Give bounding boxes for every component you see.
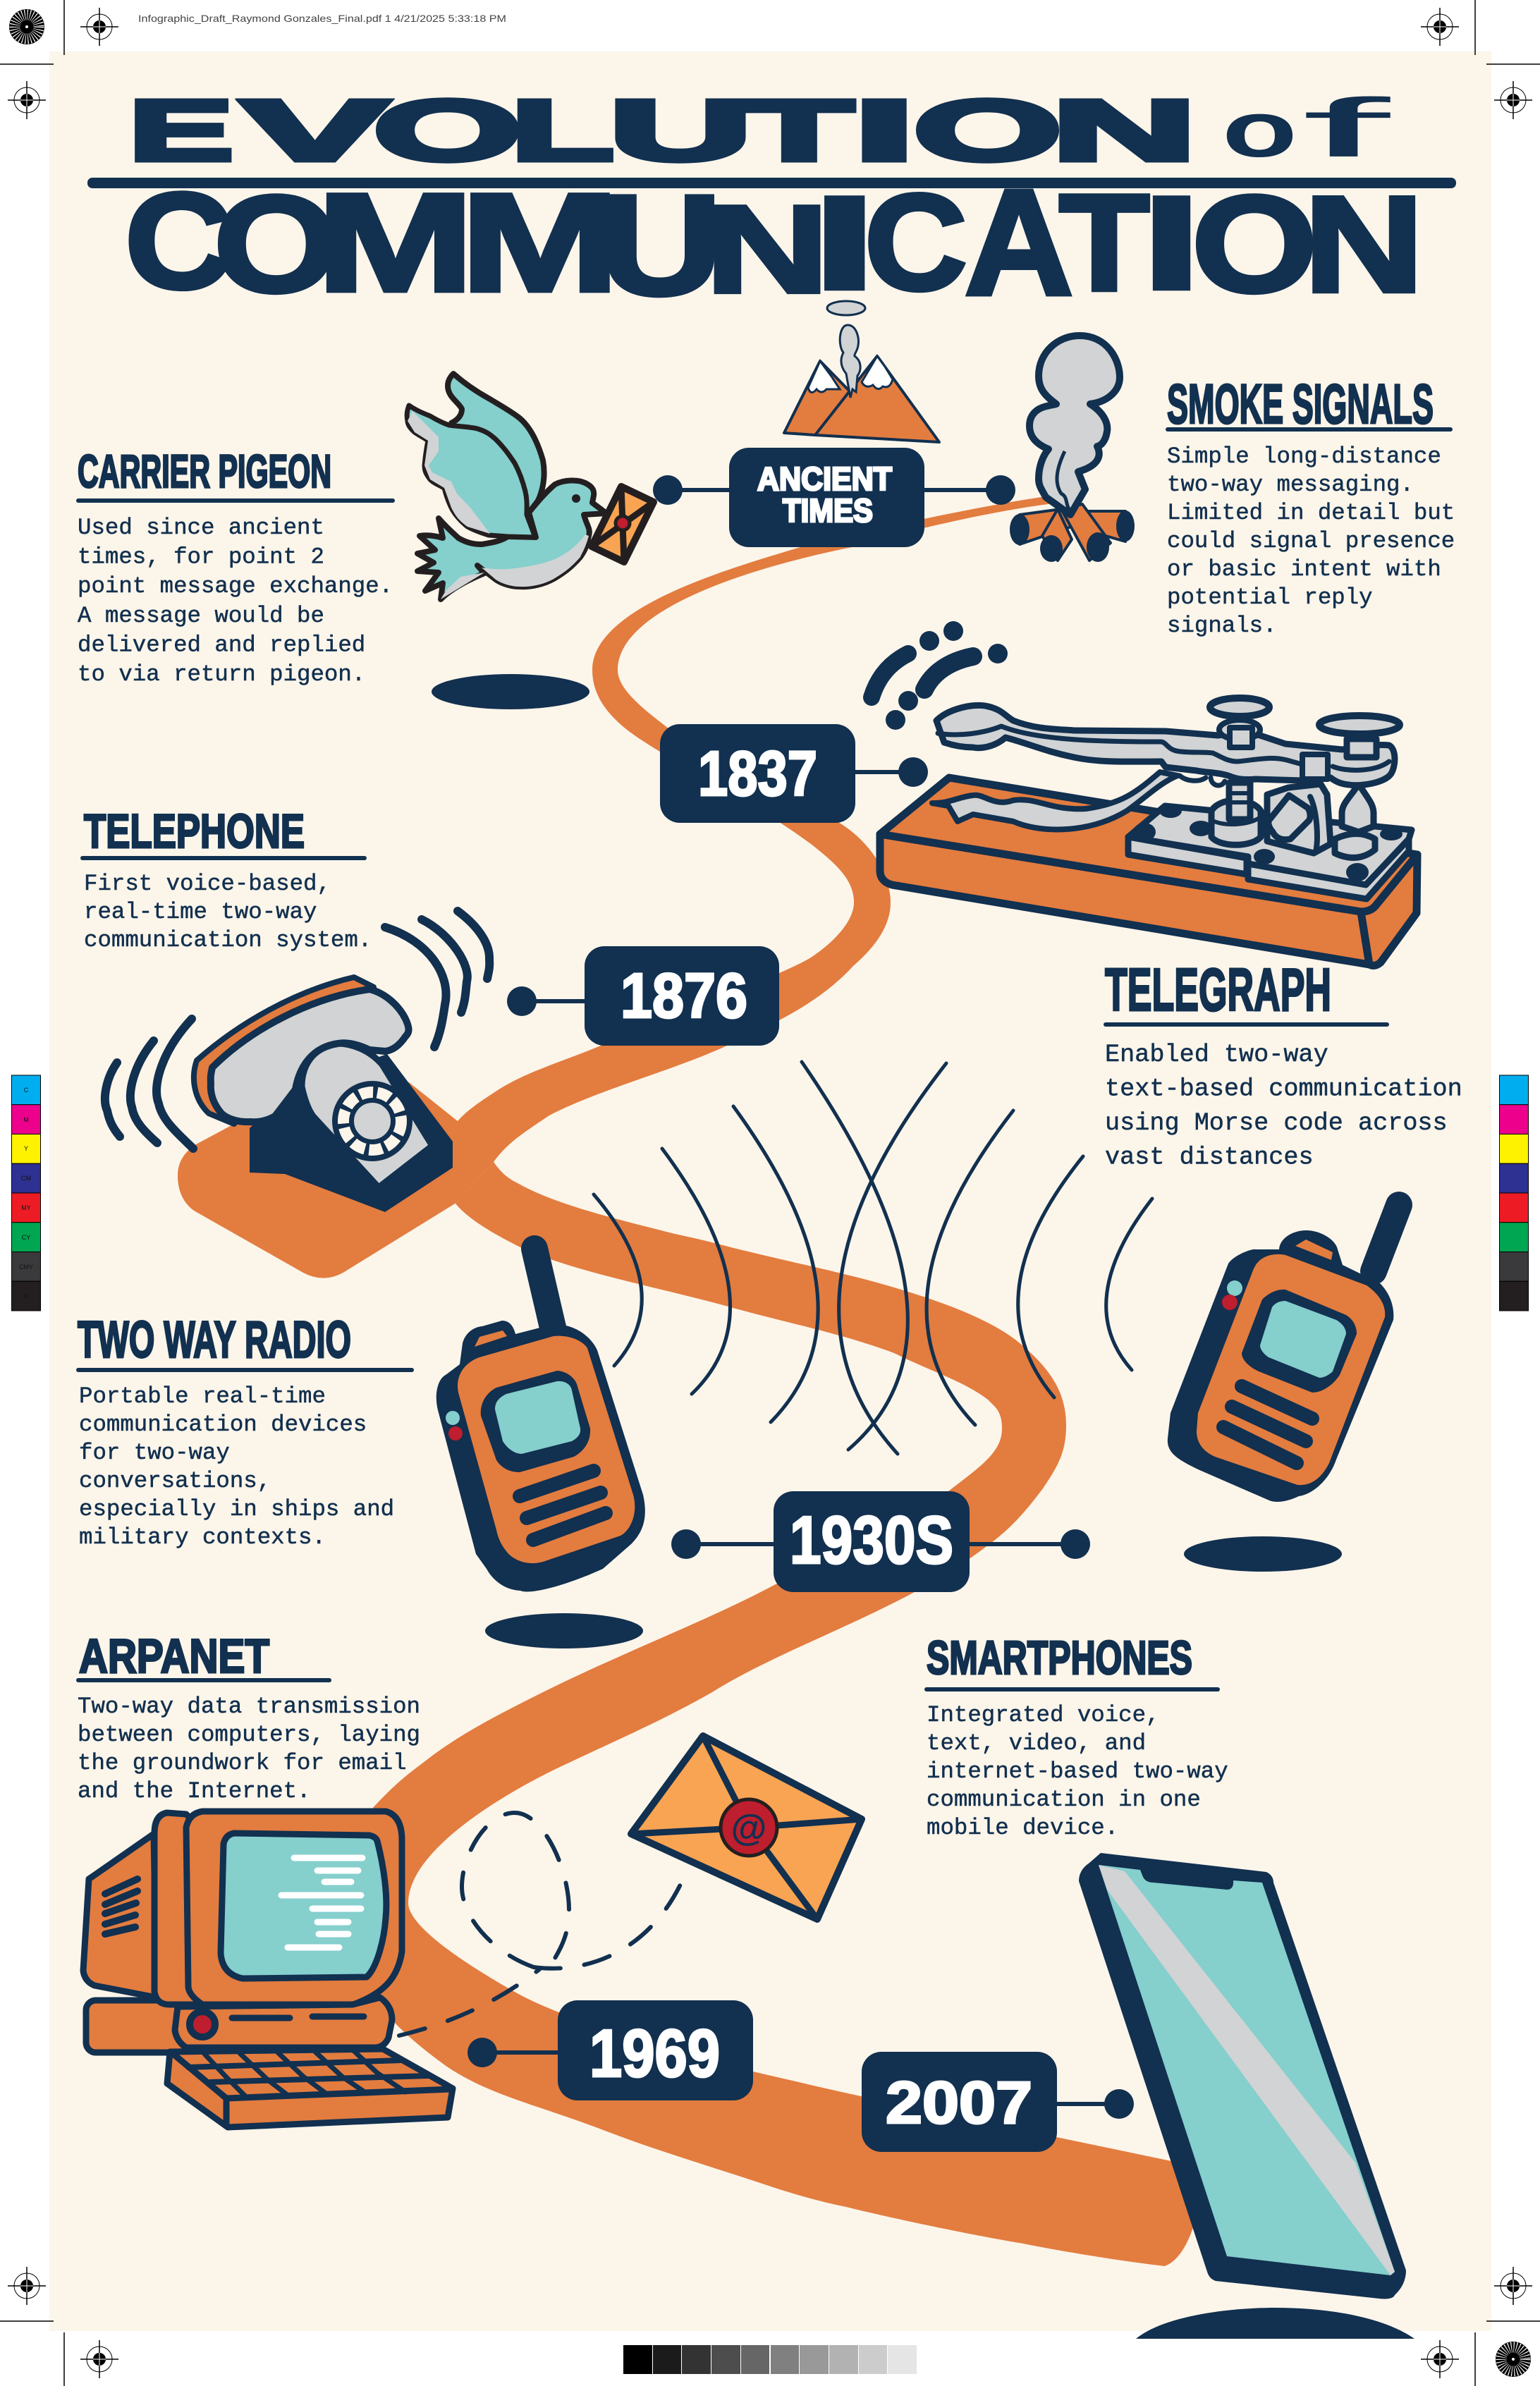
icon: left two way radio [436,1249,645,1592]
shadow: smartphone [1136,2308,1414,2339]
icon: smartphone [1079,1853,1406,2299]
section: two way radio: Portable real-time [79,1383,326,1409]
title line: Evolution of: T [745,83,853,179]
title line: Evolution of: U [609,83,752,179]
dashed email flight path [399,1813,689,2036]
title line: Communication: I [1142,170,1202,318]
date marker: 1969 [468,2000,753,2100]
section: telephone: communication system. [84,927,372,953]
colour bar left: M [23,1116,29,1123]
title line: Evolution of [128,82,1391,298]
section: telegraph: text-based communication [1105,1075,1462,1103]
section: smoke signals: Simple long-distance [1167,443,1441,470]
section: arpanet [76,1629,420,1804]
date marker: ancient times: TIMES [783,492,873,529]
date marker: 1969: 1969 [589,2016,720,2091]
section: two way radio: military contexts. [79,1524,326,1550]
section: smoke signals: potential reply [1167,585,1373,611]
date marker: 1876: 1876 [621,961,747,1032]
shadow: left radio [485,1613,643,1648]
title line: Communication: A [965,159,1073,327]
title line: Communication: C [125,166,232,318]
section: arpanet: ARPANET [79,1629,269,1683]
section: two way radio: conversations, [79,1468,271,1494]
colour bar left: CY [22,1234,30,1241]
title line: Communication: O [214,168,338,322]
section: arpanet: between computers, laying [78,1722,420,1748]
section: telegraph: Enabled two-way [1105,1041,1328,1069]
print slug text: Infographic_Draft_Raymond Gonzales_Final.pdf 1 4/21/2025 5:33:18 PM [138,13,506,24]
section: carrier pigeon: Used since ancient [78,515,324,541]
section: arpanet: and the Internet. [78,1778,310,1804]
section: carrier pigeon: to via return pigeon. [78,661,365,687]
icon: telephone sound waves [105,911,489,1149]
section: carrier pigeon: CARRIER PIGEON [78,445,331,497]
date marker: 1930s [671,1491,1090,1592]
section: telegraph: using Morse code across [1105,1109,1448,1137]
title line: Communication: N [705,181,829,320]
title line: Communication: I [812,170,876,318]
section: two way radio: communication devices [79,1412,367,1438]
date marker: 2007 [862,2052,1134,2152]
title line: Evolution of: O [374,83,521,179]
section: telegraph: vast distances [1105,1144,1314,1172]
title line: Communication: U [599,166,722,326]
colour bar left: MY [21,1204,31,1211]
section: arpanet: Two-way data transmission [78,1694,420,1720]
title line: Communication: T [1059,166,1149,321]
section: carrier pigeon [76,445,395,687]
section: two way radio: TWO WAY RADIO [78,1311,351,1369]
icon: vintage computer [83,1811,453,2127]
section: carrier pigeon: delivered and replied [78,632,365,658]
title line: Communication [125,159,1424,327]
section: carrier pigeon: A message would be [78,603,324,629]
title line: Communication: M [317,166,475,322]
section: telegraph: TELEGRAPH [1105,957,1331,1024]
colour bar left: C [24,1087,29,1094]
section: smartphones: communication in one [927,1787,1201,1813]
section: telephone: real-time two-way [84,899,317,925]
section: two way radio: for two-way [79,1440,230,1466]
section: smoke signals: Limited in detail but [1167,500,1455,526]
icon: email envelope [631,1736,862,1919]
title line: Evolution of: O [914,83,1061,179]
section: smartphones: Integrated voice, [927,1702,1159,1728]
title line: Communication: C [864,166,967,319]
date marker: 1876 [507,946,779,1046]
shadow: pigeon [432,674,589,709]
colour bar right [1499,1075,1529,1311]
date marker: 1837: 1837 [698,739,817,809]
section: smartphones: mobile device. [927,1815,1118,1841]
section: telephone [80,804,372,953]
section: smoke signals [1166,372,1455,639]
date marker: ancient times: ANCIENT [757,460,892,497]
colour bar left: CM [21,1175,31,1182]
section: smoke signals: or basic intent with [1167,556,1441,582]
title line: Communication: N [1303,169,1424,322]
icon: smoke signal fire [1010,336,1135,562]
colour bar left: CMY [19,1264,33,1271]
icon: mountains with smoke [784,301,939,442]
section: carrier pigeon: times, for point 2 [78,544,324,570]
title line: Communication: O [1192,168,1317,322]
shadow: right radio [1184,1536,1342,1572]
date marker: 1837 [660,724,928,823]
section: two way radio: especially in ships and [79,1496,394,1522]
date marker: 1930s: 1930S [790,1503,953,1578]
title line: Evolution of: I [854,83,915,179]
colour bar left: Y [24,1145,28,1152]
timeline road [178,496,1213,2266]
section: telegraph [1104,957,1462,1172]
icon: email envelope: @ [731,1808,766,1849]
icon: telegraph key [880,698,1417,965]
section: carrier pigeon: point message exchange. [78,573,393,599]
colour bar left [11,1075,41,1311]
title line: Evolution of: V [242,83,388,179]
section: arpanet: the groundwork for email [78,1750,407,1776]
icon: right two way radio [1168,1205,1399,1502]
section: smoke signals: two-way messaging. [1167,472,1414,498]
title line: Evolution of: o [1222,85,1297,174]
section: smartphones: text, video, and [927,1730,1146,1756]
title line: Evolution of: N [1052,83,1196,179]
section: smoke signals: could signal presence [1167,528,1455,554]
section: smoke signals: signals. [1167,613,1277,639]
date marker: ancient times [653,448,1015,547]
grayscale bar [623,2345,917,2374]
date marker: 2007: 2007 [886,2069,1032,2136]
section: telephone: TELEPHONE [84,804,305,858]
icon: rotary telephone [194,977,453,1212]
section: telephone: First voice-based, [84,871,331,897]
section: two way radio [76,1311,414,1550]
radio waves [594,1062,1152,1454]
colour bar left: K [24,1292,28,1299]
title line: Communication: M [460,166,620,322]
section: smartphones: internet-based two-way [927,1758,1228,1785]
title line: Evolution of: E [128,83,233,179]
section: smartphones [924,1632,1228,1841]
title line: Evolution of: f [1302,82,1390,175]
title divider bar [87,178,1456,188]
title line: Evolution of: L [511,83,613,179]
section: smartphones: SMARTPHONES [927,1632,1192,1684]
icon: morse code marks [872,621,1008,730]
icon: carrier pigeon [407,374,654,599]
